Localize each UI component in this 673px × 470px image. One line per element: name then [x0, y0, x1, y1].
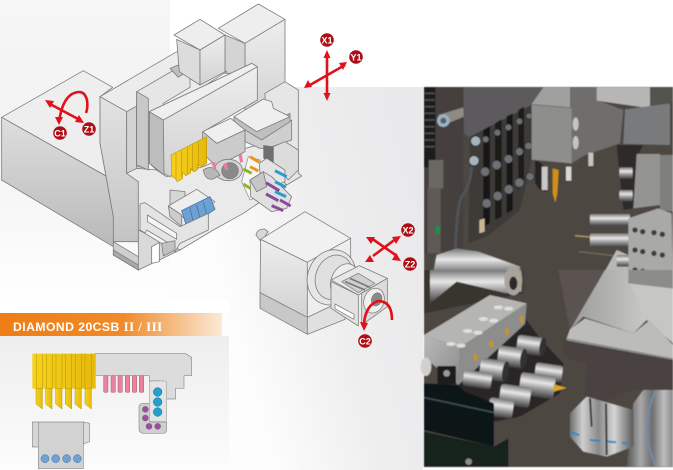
axis Z1 C1 arrows [45, 92, 87, 125]
main column [100, 52, 300, 270]
badge X2 [401, 223, 415, 237]
blue tool block [168, 189, 215, 227]
badge Z1: Z1 [84, 124, 94, 134]
blue tools diagram [149, 381, 167, 422]
axis label badges [53, 33, 417, 348]
rear column [218, 4, 285, 113]
upper spindle head [432, 248, 522, 280]
rear knob [256, 229, 268, 242]
badge Y1: Y1 [350, 52, 362, 62]
coloured tool holder [242, 157, 292, 212]
lower bracket [140, 203, 208, 263]
background panels [0, 0, 423, 470]
badge Z2 [403, 257, 417, 271]
purple tools [266, 183, 291, 211]
main spindle and collet [627, 390, 673, 467]
badge C2 [358, 334, 372, 348]
badge Z1 [82, 122, 96, 136]
lower photo: tool block and spindle [421, 266, 673, 467]
guide bush bracket [331, 266, 388, 326]
yellow gang tools [171, 137, 207, 182]
badge Y1 [349, 50, 363, 64]
axis arrows and labels [45, 50, 401, 331]
blue tools [275, 171, 287, 197]
badge C1 [53, 126, 67, 140]
silver tool block [424, 295, 527, 347]
axis X1 Y1 arrows [304, 50, 347, 101]
badge C2: C2 [359, 336, 371, 346]
black cover [424, 383, 494, 447]
lower tool block diagram [32, 422, 90, 469]
badge Z2: Z2 [405, 260, 415, 270]
motor box [174, 19, 225, 85]
panel: tool layout [0, 300, 229, 470]
upper photo: gang tool post [424, 87, 673, 280]
badge X1: X1 [321, 36, 333, 46]
green tools [243, 169, 252, 189]
yellow gang tools diagram [32, 354, 96, 409]
live tool cylinders [459, 327, 567, 425]
banner: model name: DIAMOND 20CSB II / III [13, 319, 163, 334]
spindle flange [300, 243, 364, 312]
right block and cylinders [617, 145, 643, 210]
Y slide tall plates [137, 63, 257, 177]
photo: machining area close-up [421, 87, 673, 467]
purple tool holder diagram [139, 403, 167, 433]
turret right housing [234, 82, 302, 185]
milling turret block [532, 87, 623, 163]
tailstock sub-spindle illustration [256, 212, 388, 334]
badge X1 [320, 33, 334, 47]
tool plate diagram [95, 353, 192, 399]
badge C1: C1 [54, 128, 66, 138]
pink tools diagram [104, 376, 144, 392]
tool cluster backing [458, 320, 563, 422]
axis X2 Z2 arrows [365, 236, 401, 262]
sub tool block centre [203, 118, 245, 167]
badge X2: X2 [402, 226, 414, 236]
main machine illustration [2, 4, 302, 270]
axis C2 arrow [360, 301, 392, 331]
banner: model name [0, 313, 222, 336]
headstock left block [2, 71, 113, 247]
spindle centre with pink tools [203, 154, 243, 181]
orange tools [250, 157, 259, 171]
body cube [260, 212, 351, 334]
